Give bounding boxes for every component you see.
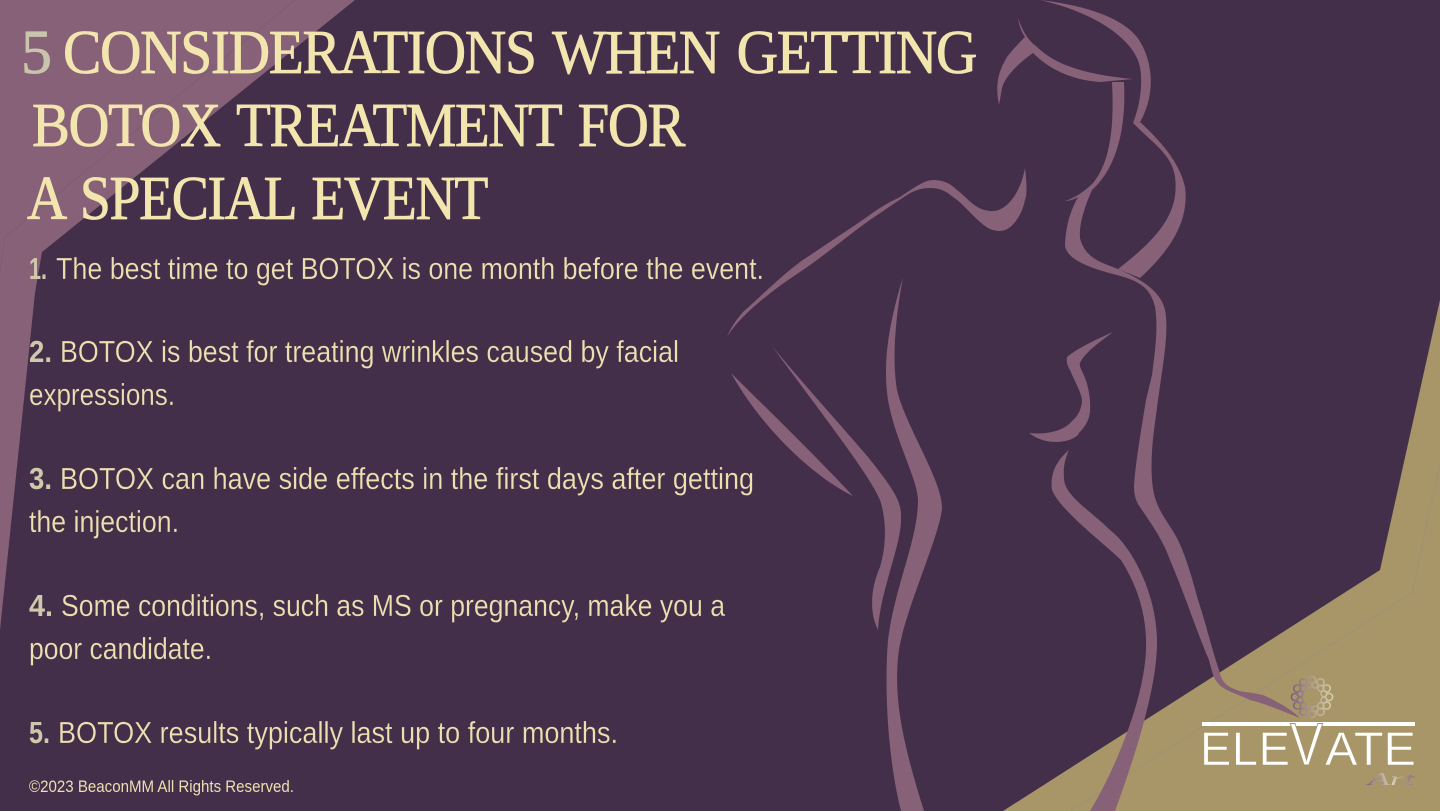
- logo script: Art: [1366, 769, 1416, 789]
- consideration 3: [29, 461, 754, 539]
- consideration 5: 5.: [29, 715, 50, 750]
- logo wordmark: V: [1290, 710, 1323, 778]
- mauve corner panel: [0, 0, 355, 630]
- neck, shoulder and back line: [1065, 82, 1300, 718]
- consideration 1: The best time to get BOTOX is one month before the event.: [56, 251, 764, 286]
- forearm line inner: [772, 346, 901, 630]
- consideration 2: expressions.: [29, 377, 175, 412]
- consideration 3: 3.: [29, 461, 52, 496]
- consideration 4: [29, 588, 726, 666]
- hip line: [1052, 450, 1157, 811]
- forearm line lower: [731, 373, 853, 496]
- title: BOTOX TREATMENT FOR: [32, 92, 686, 160]
- consideration 4: 4.: [29, 588, 53, 623]
- consideration 5: BOTOX results typically last up to four months.: [58, 715, 618, 750]
- hair crown stroke: [1040, 0, 1151, 123]
- title number: 5: [21, 19, 52, 87]
- title: A SPECIAL EVENT: [27, 165, 488, 233]
- copyright: ©2023 BeaconMM All Rights Reserved.: [29, 777, 294, 796]
- consideration 2: 2.: [29, 334, 52, 369]
- title: CONSIDERATIONS WHEN GETTING: [63, 19, 976, 87]
- consideration 1: 1.: [29, 251, 47, 286]
- logo wordmark: ATE: [1325, 722, 1416, 775]
- consideration 3: BOTOX can have side effects in the first days after getting: [60, 461, 754, 496]
- logo: Elevate Art: [1200, 676, 1416, 789]
- consideration 2: [29, 334, 679, 412]
- consideration 4: poor candidate.: [29, 631, 212, 666]
- chest line: [1029, 332, 1113, 442]
- hair loop: [1118, 122, 1186, 278]
- consideration 2: BOTOX is best for treating wrinkles caused by facial: [60, 334, 679, 369]
- consideration 3: the injection.: [29, 504, 179, 539]
- title: [21, 19, 976, 233]
- consideration 4: Some conditions, such as MS or pregnancy, make you a: [61, 588, 726, 623]
- silhouette illustration: [727, 0, 1300, 811]
- logo wordmark: ELE: [1200, 722, 1290, 775]
- gold corner panel: [1003, 300, 1440, 811]
- logo top bar: [1202, 722, 1415, 726]
- raised arm line: [727, 168, 1026, 337]
- icon: mandala: [1291, 676, 1333, 718]
- torso left line: [886, 277, 942, 811]
- hair fringe stroke: [997, 18, 1133, 105]
- logo wordmark: [1200, 710, 1416, 778]
